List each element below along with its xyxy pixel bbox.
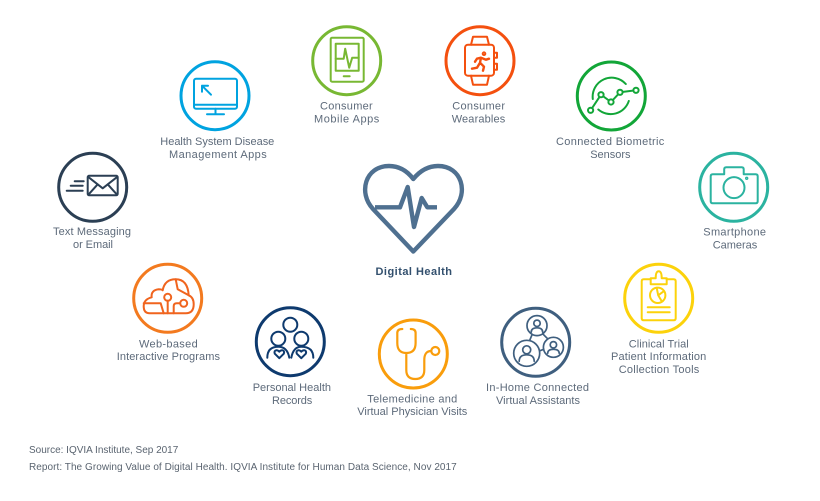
panel: Clinical Trial Patient Information Collection Tools: [611, 264, 706, 376]
panel: Text Messaging or Email: [53, 153, 131, 251]
label: Virtual Physician Visits: [357, 406, 468, 418]
label: Consumer: [452, 100, 505, 112]
icon: camera: [700, 153, 768, 221]
panel: Consumer Wearables: [446, 27, 514, 126]
label: Records: [272, 395, 313, 407]
label: Wearables: [452, 114, 506, 126]
label: Health System Disease: [160, 136, 274, 148]
icon: monitor: [181, 62, 249, 130]
icon: heart with pulse: [365, 166, 462, 252]
label: Interactive Programs: [117, 351, 220, 363]
panel: Digital Health centre: [365, 166, 462, 278]
icon: tablet: [313, 27, 381, 95]
label: Cameras: [713, 239, 758, 251]
icon: stethoscope: [379, 320, 447, 388]
label: Text Messaging: [53, 226, 131, 238]
panel: Health System Disease Management Apps: [160, 62, 274, 161]
report note: Report: The Growing Value of Digital Health. IQVIA Institute for Human Data Science, Nov 2017: [29, 462, 457, 473]
panel: In-Home Connected Virtual Assistants: [486, 308, 589, 407]
icon: envelope: [59, 153, 127, 221]
label: Personal Health: [253, 382, 331, 394]
label: Virtual Assistants: [496, 395, 580, 407]
icon: clipboard: [625, 264, 693, 332]
label: Smartphone: [703, 227, 766, 239]
label: Telemedicine and: [367, 393, 457, 405]
panel: Personal Health Records: [253, 308, 331, 407]
label: Consumer: [320, 100, 373, 112]
panel: Smartphone Cameras: [700, 153, 768, 251]
label: Patient Information: [611, 351, 706, 363]
icon: family with hearts: [256, 308, 324, 376]
panel: Telemedicine and Virtual Physician Visits: [357, 320, 468, 418]
label: Sensors: [590, 149, 631, 161]
label: Management Apps: [169, 149, 267, 161]
label: Clinical Trial: [629, 338, 689, 350]
icon: connected people: [502, 308, 570, 376]
label: Web-based: [139, 338, 198, 350]
icon: smartwatch: [446, 27, 514, 95]
label: or Email: [73, 239, 113, 251]
label: In-Home Connected: [486, 382, 589, 394]
source note: Source: IQVIA Institute, Sep 2017: [29, 445, 179, 456]
panel: Connected Biometric Sensors: [556, 62, 665, 161]
icon: sensor chart: [577, 62, 645, 130]
label: Connected Biometric: [556, 136, 665, 148]
heading: Digital Health: [376, 266, 452, 278]
panel: Web-based Interactive Programs: [117, 264, 220, 363]
panel: Consumer Mobile Apps: [313, 27, 381, 126]
label: Mobile Apps: [314, 114, 380, 126]
label: Collection Tools: [619, 364, 700, 376]
icon: cloud circuit: [134, 264, 202, 332]
